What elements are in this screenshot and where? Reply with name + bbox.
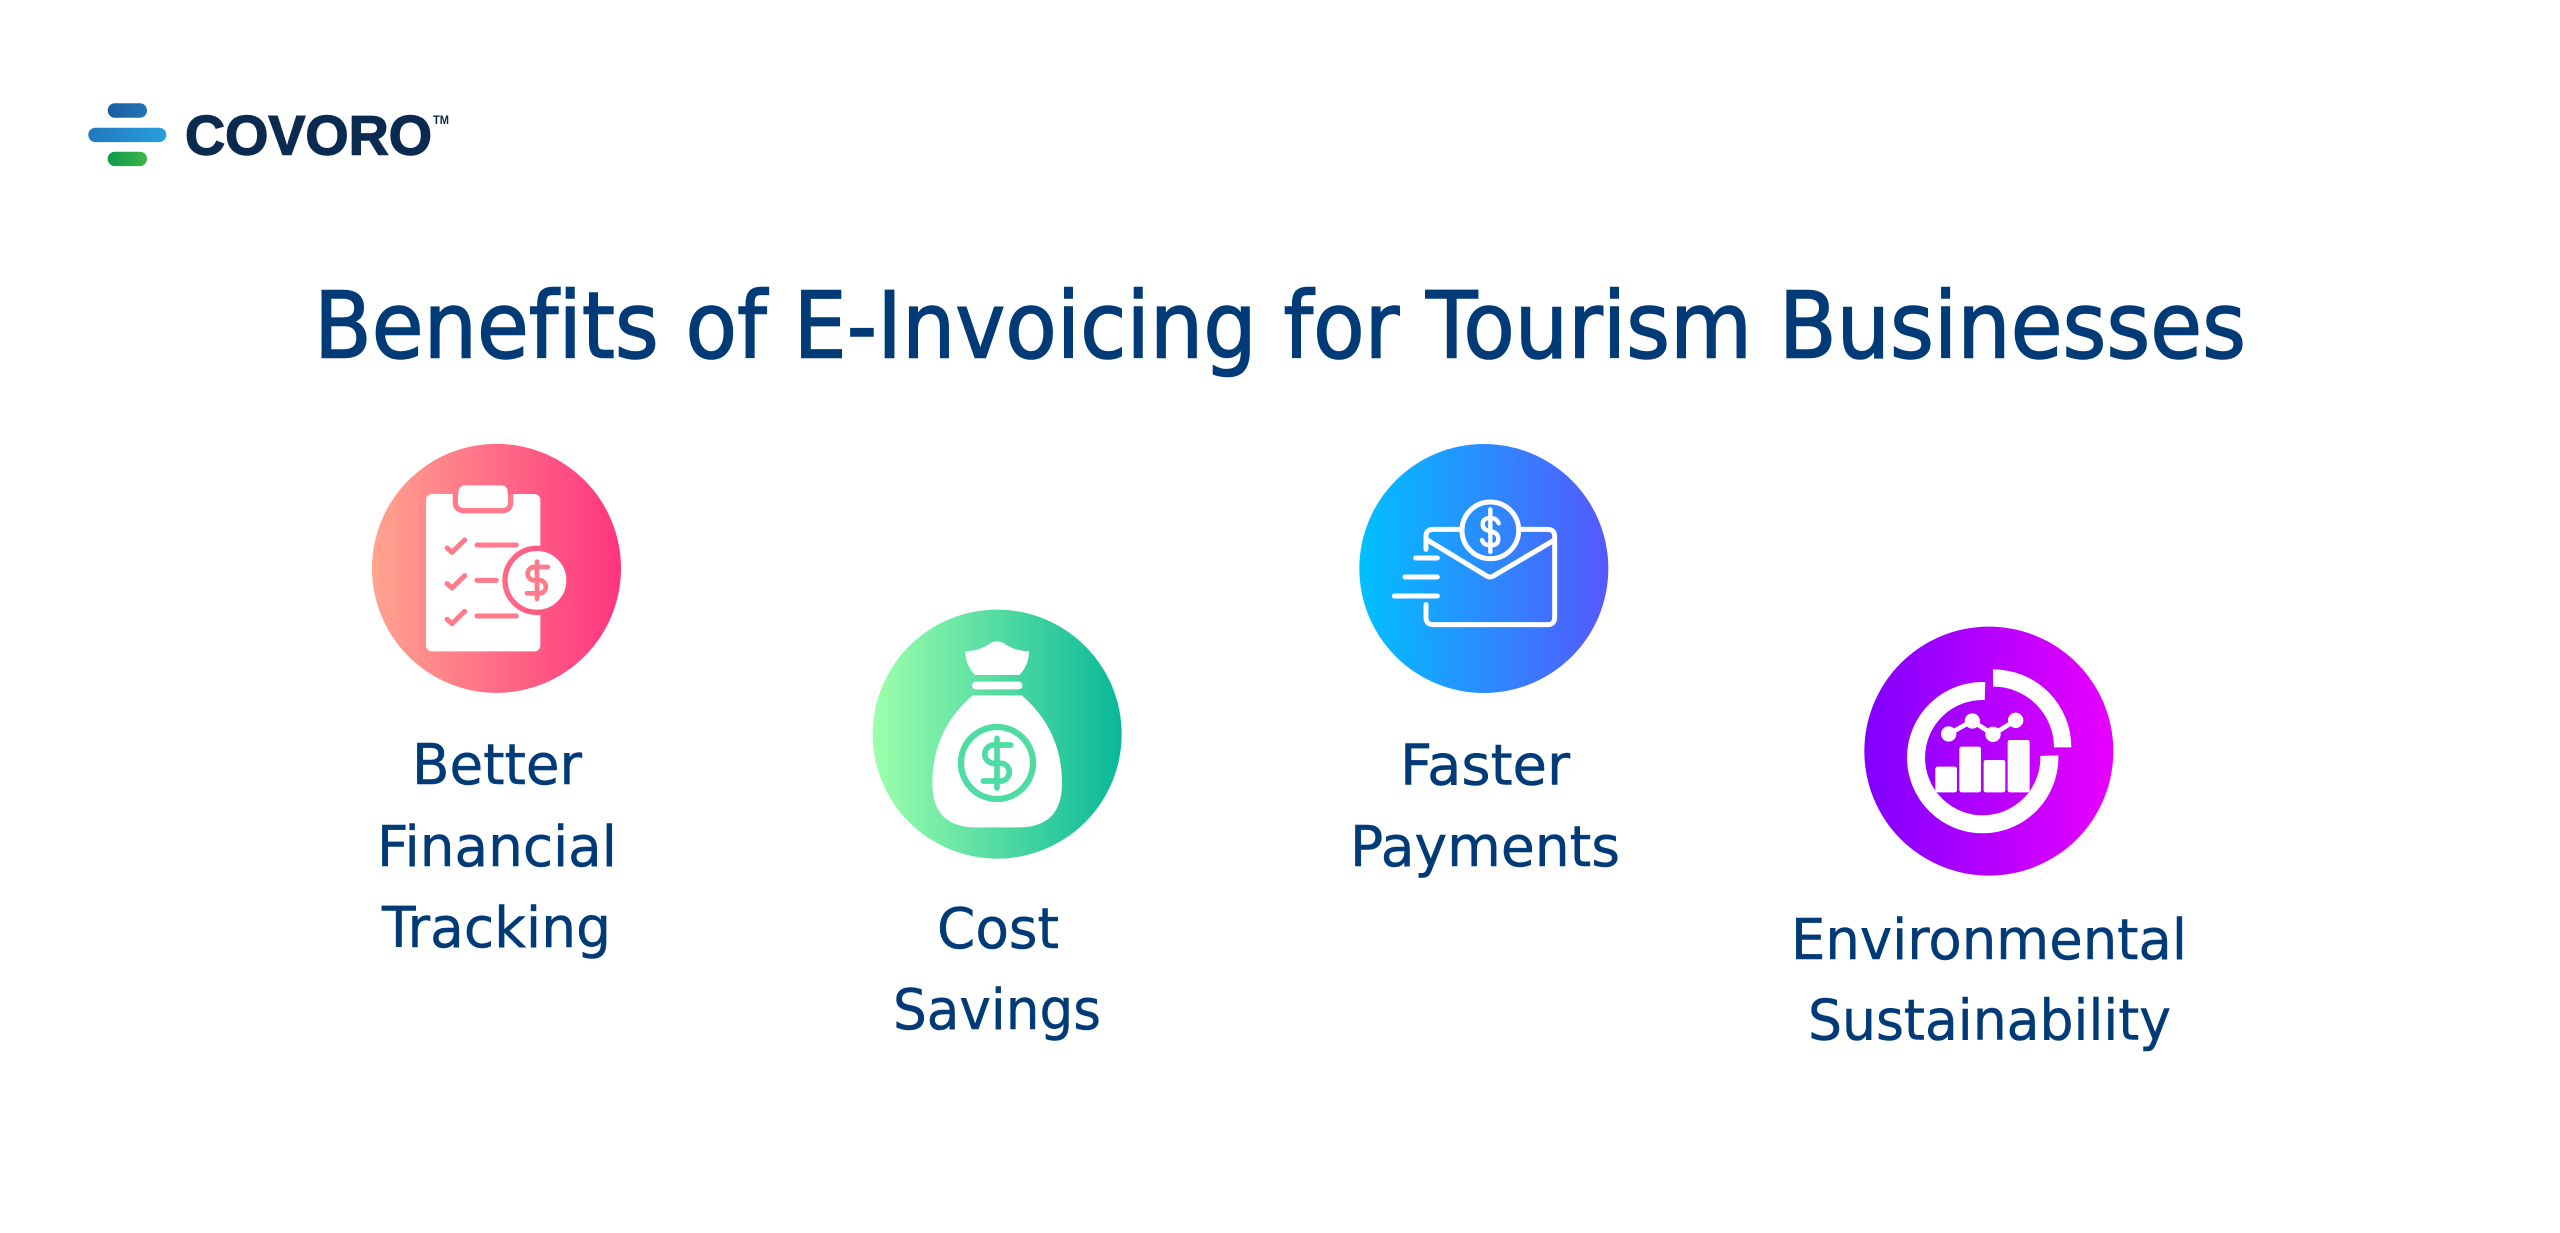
logo trademark: TM [433,115,449,127]
label [1791,908,2187,1054]
label [893,897,1101,1043]
logo: Covoro [88,103,449,166]
label: Better [412,733,583,798]
label: Payments [1350,815,1620,880]
panel: better financial tracking [372,444,621,961]
label: Tracking [381,896,611,961]
label [1350,734,1620,880]
logo wordmark: COVORO [185,104,432,166]
icon: money bag [873,610,1122,859]
panel: environmental sustainability [1791,627,2187,1054]
label: Sustainability [1808,988,2171,1054]
title: Benefits of E-Invoicing for Tourism Businesses [314,272,2246,380]
icon: ring chart with bars and trend line [1864,627,2113,876]
label: Faster [1400,734,1571,798]
label: Cost [937,897,1059,962]
panel: cost savings [873,610,1122,1043]
label: Savings [893,978,1101,1043]
panel: faster payments [1350,444,1620,880]
label: Financial [377,815,617,880]
label: Environmental [1791,908,2187,973]
icon: logo bars [88,103,166,166]
icon: envelope with dollar coin [1359,444,1608,693]
label [377,733,617,961]
icon: clipboard with dollar coin [372,444,621,693]
